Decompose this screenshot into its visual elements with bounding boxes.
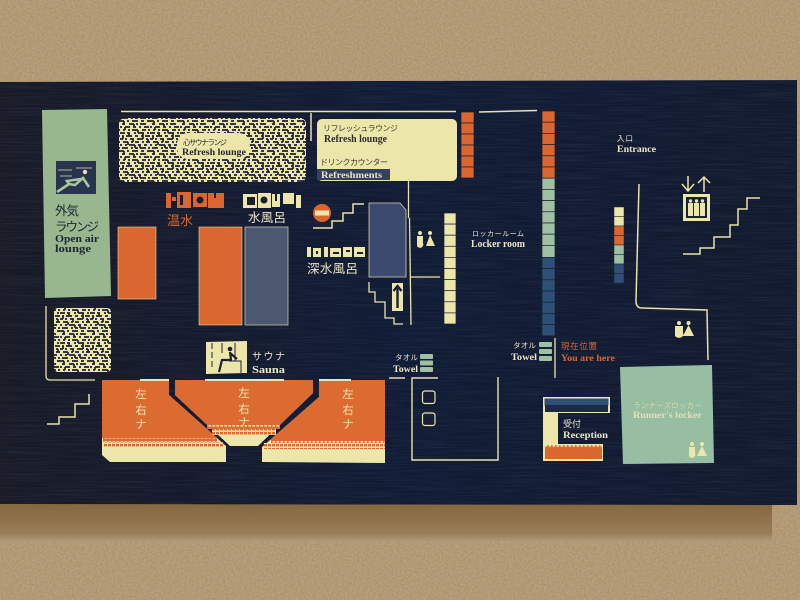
icon: restroom xyxy=(417,231,435,248)
heading: HOT sign xyxy=(166,192,224,208)
label: open air lounge: Open air xyxy=(55,233,99,245)
bath: cold xyxy=(245,227,288,325)
label: locker room: ロッカールーム xyxy=(472,230,524,238)
tag: refreshments: Refreshments xyxy=(321,171,382,181)
label: entrance: Entrance xyxy=(617,145,656,155)
label: right sauna xyxy=(342,387,354,431)
icon: towel stack right xyxy=(539,342,552,361)
label: towel right xyxy=(511,341,537,363)
wall line: lower left xyxy=(46,306,95,380)
panel: runner's locker: Runner's locker xyxy=(633,411,703,421)
panel: refresh lounge and refreshments xyxy=(317,119,457,181)
icon: towel stack left xyxy=(420,354,433,372)
label: right sauna: 右 xyxy=(342,403,354,417)
label: cold bath: 水風呂 xyxy=(248,211,286,225)
panel: sauna left xyxy=(102,379,226,462)
panel: refresh lounge and refreshments: ドリンクカウンター xyxy=(320,158,388,167)
navy map board xyxy=(0,80,797,505)
label: deep bath: 深水風呂 xyxy=(307,262,358,276)
icon: restroom locker xyxy=(689,442,707,458)
label: right sauna: ナ xyxy=(342,418,354,431)
label: you are here: 現在位置 xyxy=(561,341,597,351)
label: entrance xyxy=(617,134,656,155)
bath: warm large xyxy=(199,227,242,325)
icon: sauna xyxy=(206,341,247,374)
panel: reception xyxy=(543,397,610,461)
stairs: to deep bath xyxy=(313,204,364,228)
label: reception xyxy=(563,418,609,441)
label: towel left xyxy=(393,353,418,375)
locker column: orange, green, blue xyxy=(542,111,555,336)
label: right sauna: 左 xyxy=(342,387,354,401)
label: refresh lounge oval: Refresh lounge xyxy=(182,148,246,158)
orange locker column xyxy=(461,112,474,178)
label: left sauna xyxy=(135,387,147,431)
heading: COLD sign xyxy=(243,192,301,208)
bath: warm small xyxy=(118,227,156,299)
label: open air lounge: ラウンジ xyxy=(55,220,99,234)
label: open air lounge: lounge xyxy=(55,243,91,255)
label: open air lounge: 外気 xyxy=(55,203,79,218)
small colour key column xyxy=(614,207,624,283)
icon: open air lounge xyxy=(56,161,96,194)
wall line: you are here xyxy=(554,338,556,378)
label: towel left: Towel xyxy=(393,365,418,375)
label: centre sauna xyxy=(238,386,250,429)
wall line: entrance xyxy=(636,184,708,360)
label: towel right: タオル xyxy=(513,341,536,350)
label: centre sauna: ナ xyxy=(238,416,250,429)
panel: runner's locker: ランナーズロッカー xyxy=(633,400,702,410)
label: left sauna: ナ xyxy=(135,418,147,431)
label: centre sauna: 右 xyxy=(238,402,250,416)
label: reception: Reception xyxy=(563,431,609,441)
label: sauna: サウナ xyxy=(252,351,285,363)
label: reception: 受付 xyxy=(563,418,581,429)
wall line: locker room xyxy=(408,181,440,325)
panel: sauna right xyxy=(262,379,385,463)
label: entrance: 入口 xyxy=(617,134,633,143)
bath: deep xyxy=(369,203,406,277)
stairs: lower xyxy=(369,282,403,324)
label: you are here: You are here xyxy=(561,354,615,364)
label: locker room: Locker room xyxy=(471,239,526,250)
room outline xyxy=(389,377,498,460)
label: left sauna: 左 xyxy=(135,387,147,401)
panel: open air lounge xyxy=(42,109,111,298)
label: you are here xyxy=(561,341,615,364)
panel: sauna centre xyxy=(175,379,313,446)
label: open air lounge xyxy=(55,203,99,255)
icon: up arrow xyxy=(392,283,403,311)
cream locker column xyxy=(444,213,456,324)
heading: DEEP sign xyxy=(307,247,365,257)
label: left sauna: 右 xyxy=(135,403,147,417)
label: refresh lounge oval xyxy=(177,133,250,159)
stairs: right xyxy=(683,198,760,254)
icon: elevator xyxy=(682,176,710,221)
label: sauna: Sauna xyxy=(252,365,286,376)
label: sauna xyxy=(252,351,286,376)
panel: refresh lounge and refreshments: リフレッシュラウンジ xyxy=(323,124,398,133)
panel: refresh lounge and refreshments: Refresh lounge xyxy=(324,134,388,145)
label: refresh lounge oval: 心サウナ ランジ xyxy=(183,137,228,147)
icon: restroom right xyxy=(675,321,694,338)
panel: patterned refresh lounge xyxy=(119,118,306,182)
stairs: lower left xyxy=(47,394,89,424)
label: centre sauna: 左 xyxy=(238,386,250,400)
icon: room squares xyxy=(422,391,435,426)
panel: outdoor pattern block xyxy=(54,308,111,372)
panel: runner's locker xyxy=(620,365,714,464)
top wall lines xyxy=(121,110,537,141)
icon: no entry xyxy=(313,204,331,222)
label: towel left: タオル xyxy=(395,353,418,362)
label: locker room xyxy=(471,230,526,250)
label: towel right: Towel xyxy=(511,353,537,363)
label: warm bath: 温水 xyxy=(167,213,193,228)
